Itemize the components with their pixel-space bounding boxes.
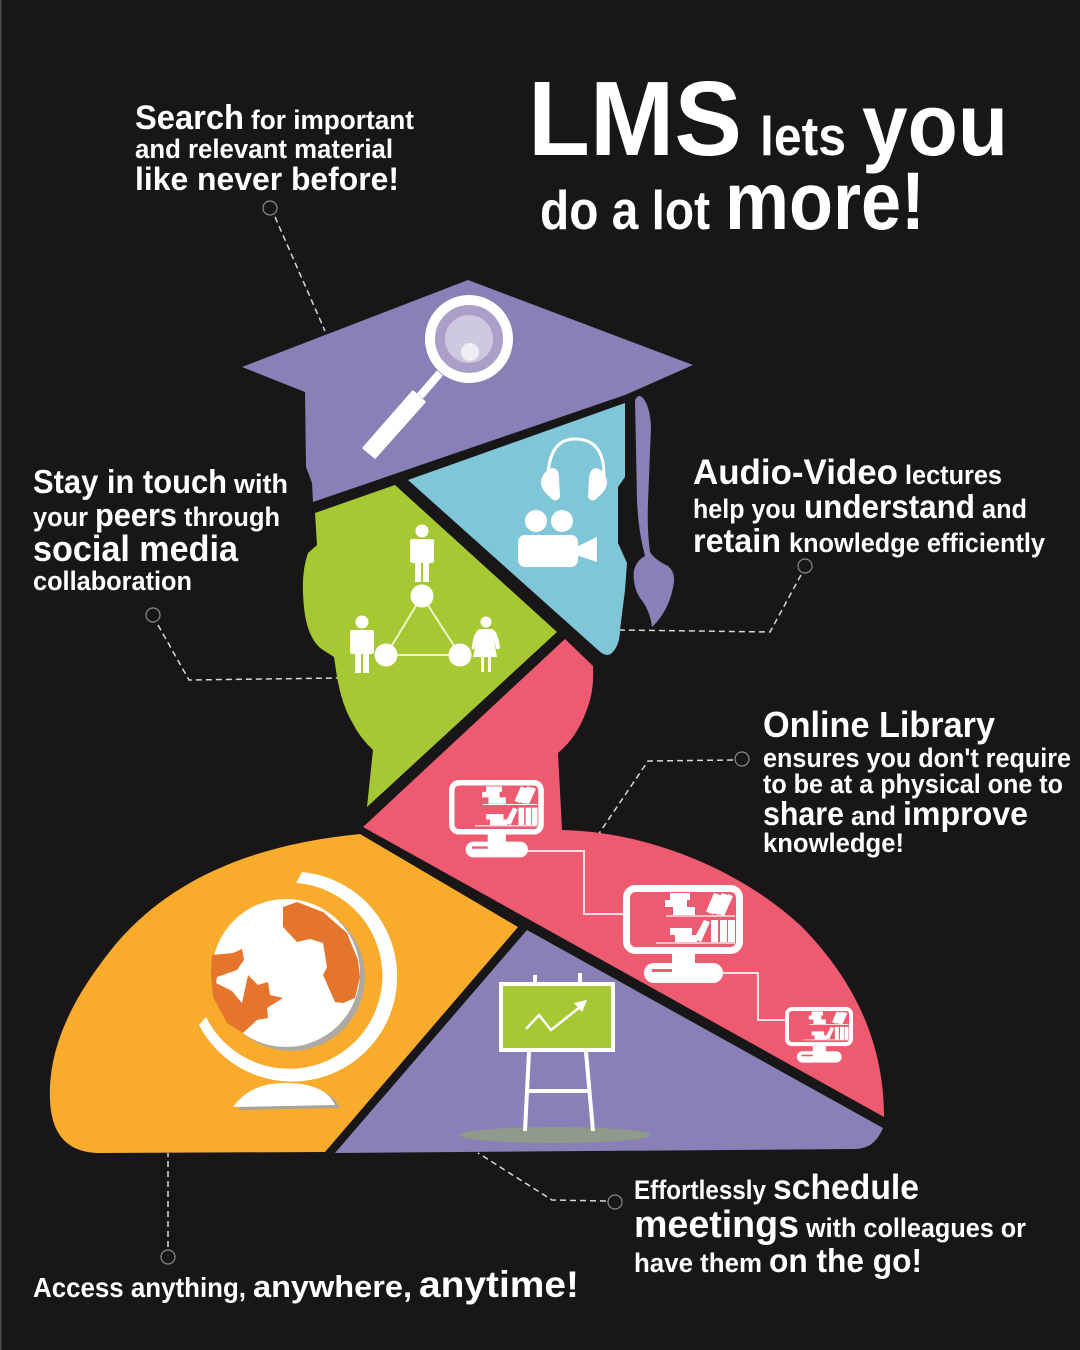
text block: social (33, 463, 288, 596)
text block: access (33, 1264, 579, 1305)
icon: monitor tiny (787, 1009, 851, 1063)
text block: schedule (634, 1168, 1026, 1279)
text block: schedule: meetings (634, 1204, 799, 1246)
panel: audio video (408, 403, 627, 655)
text block: online library: and (851, 801, 896, 831)
title: LMS (528, 60, 742, 178)
leader: audio-video (620, 559, 812, 632)
icon: monitor small (452, 783, 541, 857)
icon: monitor large (626, 888, 740, 983)
text block: audio-video: understand (804, 488, 975, 525)
text block: social: your (33, 502, 88, 532)
text block: search: Search (135, 99, 244, 137)
text block: social: Stay in touch (33, 463, 227, 500)
text block: online library: knowledge! (763, 828, 904, 858)
text block: schedule: Effortlessly (634, 1175, 766, 1205)
title: lets (760, 105, 846, 167)
leader: online library (598, 752, 749, 835)
panel: access anywhere (50, 834, 518, 1153)
text block: audio-video (693, 453, 1045, 559)
text block: access: Access anything, (33, 1272, 246, 1303)
text block: audio-video: Audio-Video (693, 453, 898, 492)
text block: social: with (233, 469, 288, 499)
text block: audio-video: and (982, 494, 1027, 524)
text block: access: anytime! (419, 1264, 579, 1305)
text block: audio-video: knowledge efficiently (789, 528, 1045, 558)
title: you (862, 75, 1008, 174)
icon: magnifying glass (364, 300, 508, 457)
text block: online library: Online Library (763, 704, 995, 745)
text block: search: like never before! (135, 161, 399, 197)
panel: schedule meetings (335, 930, 883, 1153)
text block: schedule: on the go! (769, 1242, 922, 1279)
text block: access: anywhere, (253, 1269, 412, 1304)
text block: audio-video: help you (693, 494, 796, 524)
text block: social: collaboration (33, 566, 192, 596)
text block: social: peers (95, 497, 177, 533)
icon: tassel (634, 396, 674, 627)
text block: schedule: schedule (773, 1168, 919, 1207)
leader: schedule (478, 1153, 622, 1209)
icon: social network (350, 524, 500, 673)
title: more! (725, 156, 925, 247)
icon: globe (199, 872, 397, 1110)
panel: graduation cap (242, 280, 693, 502)
text block: online library: to be at a physical one to (763, 769, 1063, 799)
icon: easel with chart (459, 973, 651, 1143)
text block: online library: share (763, 795, 844, 832)
text block: social: through (184, 502, 280, 532)
panel: online library (363, 639, 884, 1117)
panel: social media (303, 485, 557, 807)
text block: search: for important (251, 105, 414, 135)
connector lines: monitors (527, 851, 785, 1020)
text block: social: social media (33, 528, 239, 569)
title: do a lot (540, 179, 710, 241)
leader: access (161, 1153, 175, 1264)
text block: online library (763, 704, 1071, 858)
text block: audio-video: retain (693, 522, 781, 559)
leader: search (263, 201, 325, 331)
icon: headphones (541, 439, 607, 500)
text block: search: and relevant material (135, 134, 393, 164)
text block: schedule: have them (634, 1248, 762, 1278)
title (528, 60, 1008, 247)
text block: online library: improve (903, 795, 1028, 832)
text block: audio-video: lectures (905, 460, 1002, 490)
leader: social (146, 608, 338, 680)
text block: schedule: with colleagues or (805, 1213, 1026, 1243)
icon: video camera (518, 510, 597, 567)
text block: search (135, 99, 414, 197)
